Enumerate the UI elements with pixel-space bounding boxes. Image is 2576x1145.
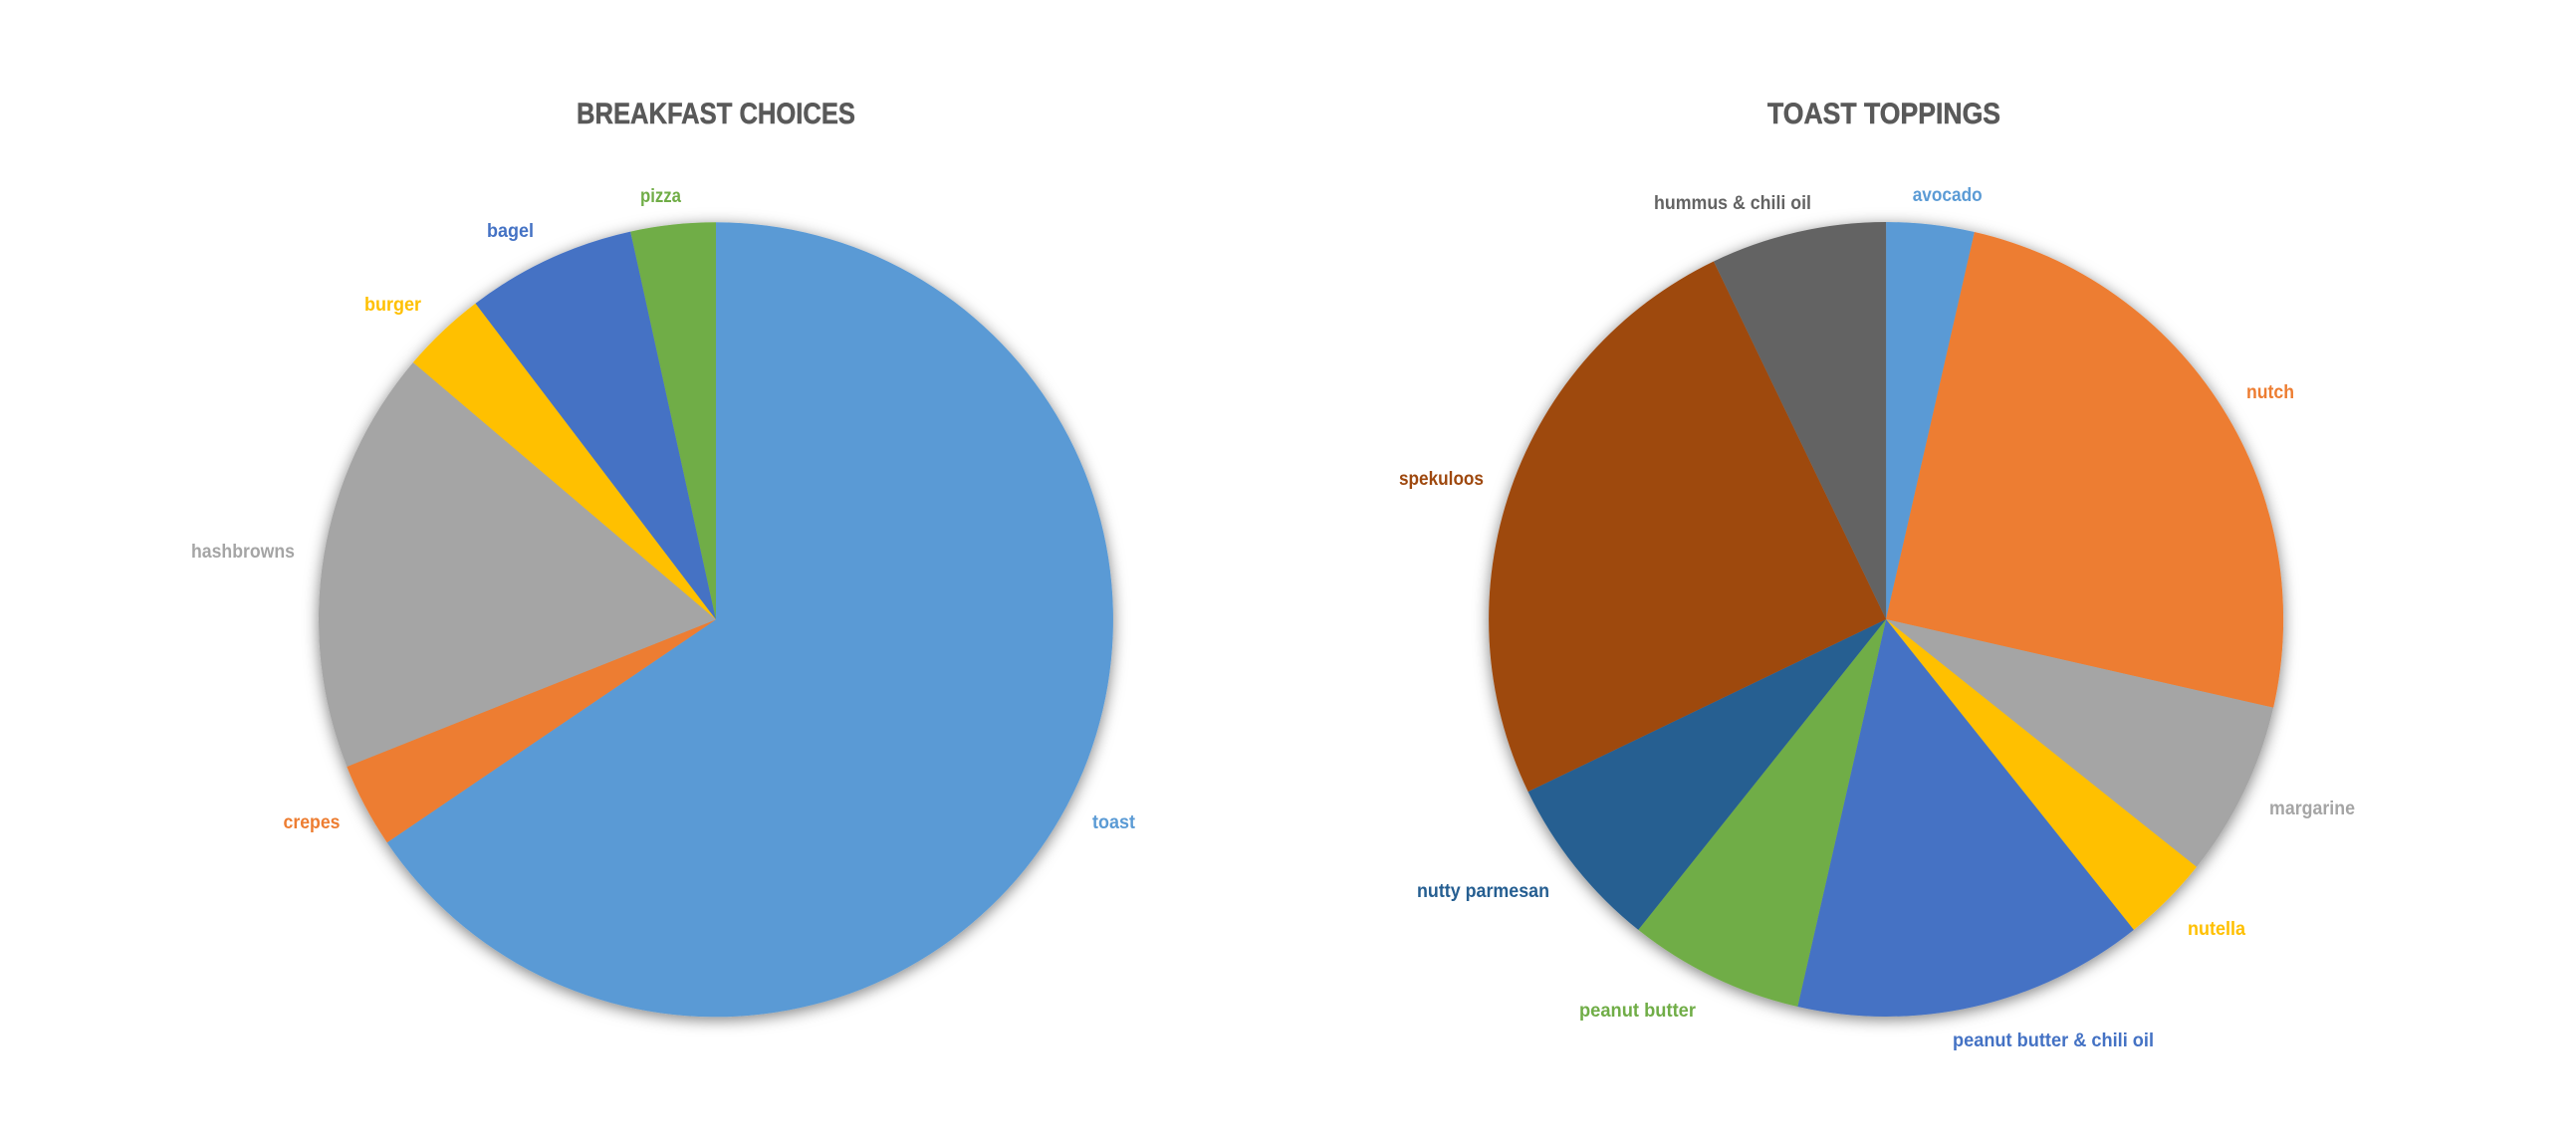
label: margarine: margarine — [2269, 798, 2355, 819]
slice: margarine — [1886, 619, 2273, 867]
panel: breakfast choices — [191, 98, 1135, 1017]
slice: pizza — [630, 222, 716, 619]
label: burger: burger — [364, 294, 421, 316]
label: pizza: pizza — [640, 185, 681, 207]
slice: hummus and chili oil — [1714, 222, 1886, 619]
slice: hashbrowns — [319, 362, 716, 767]
label: peanut butter and chili oil: peanut butter & chili oil — [1953, 1030, 2154, 1051]
panel: toast toppings — [1399, 98, 2355, 1051]
pie chart: breakfast choices — [319, 222, 1113, 1017]
slice: nutty parmesan — [1528, 619, 1886, 930]
label: nutella: nutella — [2188, 918, 2245, 940]
slice: crepes — [347, 619, 716, 842]
slice: avocado — [1886, 222, 1975, 619]
title: breakfast choices: BREAKFAST CHOICES — [577, 98, 855, 130]
label: nutty parmesan: nutty parmesan — [1417, 880, 1549, 902]
slice: nutch — [1886, 232, 2283, 708]
slice: peanut butter — [1638, 619, 1886, 1007]
slice: burger — [413, 304, 716, 619]
slice: nutella — [1886, 619, 2197, 930]
pie chart: toast toppings — [1489, 222, 2283, 1017]
slice: spekuloos — [1489, 261, 1886, 792]
label: bagel: bagel — [487, 220, 534, 242]
label: hummus and chili oil: hummus & chili oil — [1654, 192, 1811, 214]
slice: peanut butter and chili oil — [1797, 619, 2134, 1017]
label: peanut butter: peanut butter — [1579, 1000, 1696, 1022]
slice: bagel — [476, 232, 716, 619]
label: avocado: avocado — [1913, 184, 1983, 206]
title: toast toppings: TOAST TOPPINGS — [1767, 98, 2000, 130]
label: spekuloos: spekuloos — [1399, 468, 1484, 490]
label: nutch: nutch — [2246, 381, 2294, 403]
slice: toast — [387, 222, 1113, 1017]
label: toast: toast — [1092, 811, 1135, 833]
label: hashbrowns: hashbrowns — [191, 541, 295, 563]
label: crepes: crepes — [283, 811, 341, 833]
